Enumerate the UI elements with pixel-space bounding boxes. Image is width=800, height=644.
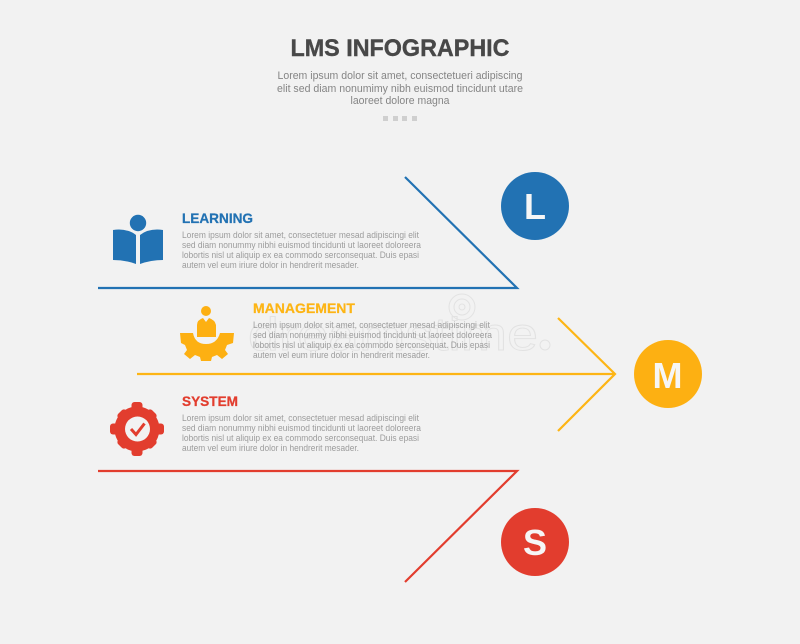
- text: learning body: [182, 230, 421, 270]
- text: management body: sed diam nonummy nibhi euismod tincidunti ut laoreet doloreera: [253, 330, 492, 340]
- heading: system: SYSTEM: [182, 393, 238, 409]
- text: system body: sed diam nonummy nibhi euismod tincidunti ut laoreet doloreera: [182, 423, 421, 433]
- text: system body: autem vel eum iriure dolor in hendrerit mesader.: [182, 443, 359, 453]
- icon: gear with check: [110, 402, 164, 456]
- panel: management: [137, 300, 702, 431]
- icon: open book reader: [113, 215, 163, 264]
- text: learning body: autem vel eum iriure dolor in hendrerit mesader.: [182, 260, 359, 270]
- panel: system: [98, 393, 569, 582]
- circle badge: L: [501, 172, 569, 240]
- text: learning body: Lorem ipsum dolor sit amet, consectetuer mesad adipiscingi elit: [182, 230, 420, 240]
- circle badge: S: S: [523, 522, 547, 563]
- circle badge: L: L: [524, 186, 546, 227]
- text: management body: [253, 320, 492, 360]
- watermark: [248, 294, 550, 360]
- text: system body: lobortis nisl ut aliquip ex ea commodo serconsequat. Duis epasi: [182, 433, 419, 443]
- heading: management: MANAGEMENT: [253, 300, 355, 316]
- heading: learning: LEARNING: [182, 210, 253, 226]
- text: management body: Lorem ipsum dolor sit amet, consectetuer mesad adipiscingi elit: [253, 320, 491, 330]
- text: system body: [182, 413, 421, 453]
- circle badge: M: M: [652, 355, 682, 396]
- text: management body: autem vel eum iriure dolor in hendrerit mesader.: [253, 350, 430, 360]
- arrow: management: [137, 318, 615, 431]
- subtitle: [277, 70, 523, 107]
- panel: learning: [98, 172, 569, 288]
- text: learning body: lobortis nisl ut aliquip ex ea commodo serconsequat. Duis epasi: [182, 250, 419, 260]
- text: learning body: sed diam nonummy nibhi euismod tincidunti ut laoreet doloreera: [182, 240, 421, 250]
- text: system body: Lorem ipsum dolor sit amet, consectetuer mesad adipiscingi elit: [182, 413, 420, 423]
- watermark: dreamstime: [248, 308, 538, 360]
- arrow: system: [98, 471, 517, 582]
- pagination dots: [383, 116, 417, 121]
- subtitle: Lorem ipsum dolor sit amet, consectetueri adipiscing: [278, 70, 523, 82]
- circle badge: M: [634, 340, 702, 408]
- arrow: learning: [98, 177, 517, 288]
- subtitle: elit sed diam nonumimy nibh euismod tincidunt utare: [277, 83, 523, 95]
- circle badge: S: [501, 508, 569, 576]
- subtitle: laoreet dolore magna: [350, 95, 450, 107]
- text: management body: lobortis nisl ut aliquip ex ea commodo serconsequat. Duis epasi: [253, 340, 490, 350]
- icon: manager on gear: [180, 306, 234, 361]
- title: LMS INFOGRAPHIC: [290, 35, 510, 62]
